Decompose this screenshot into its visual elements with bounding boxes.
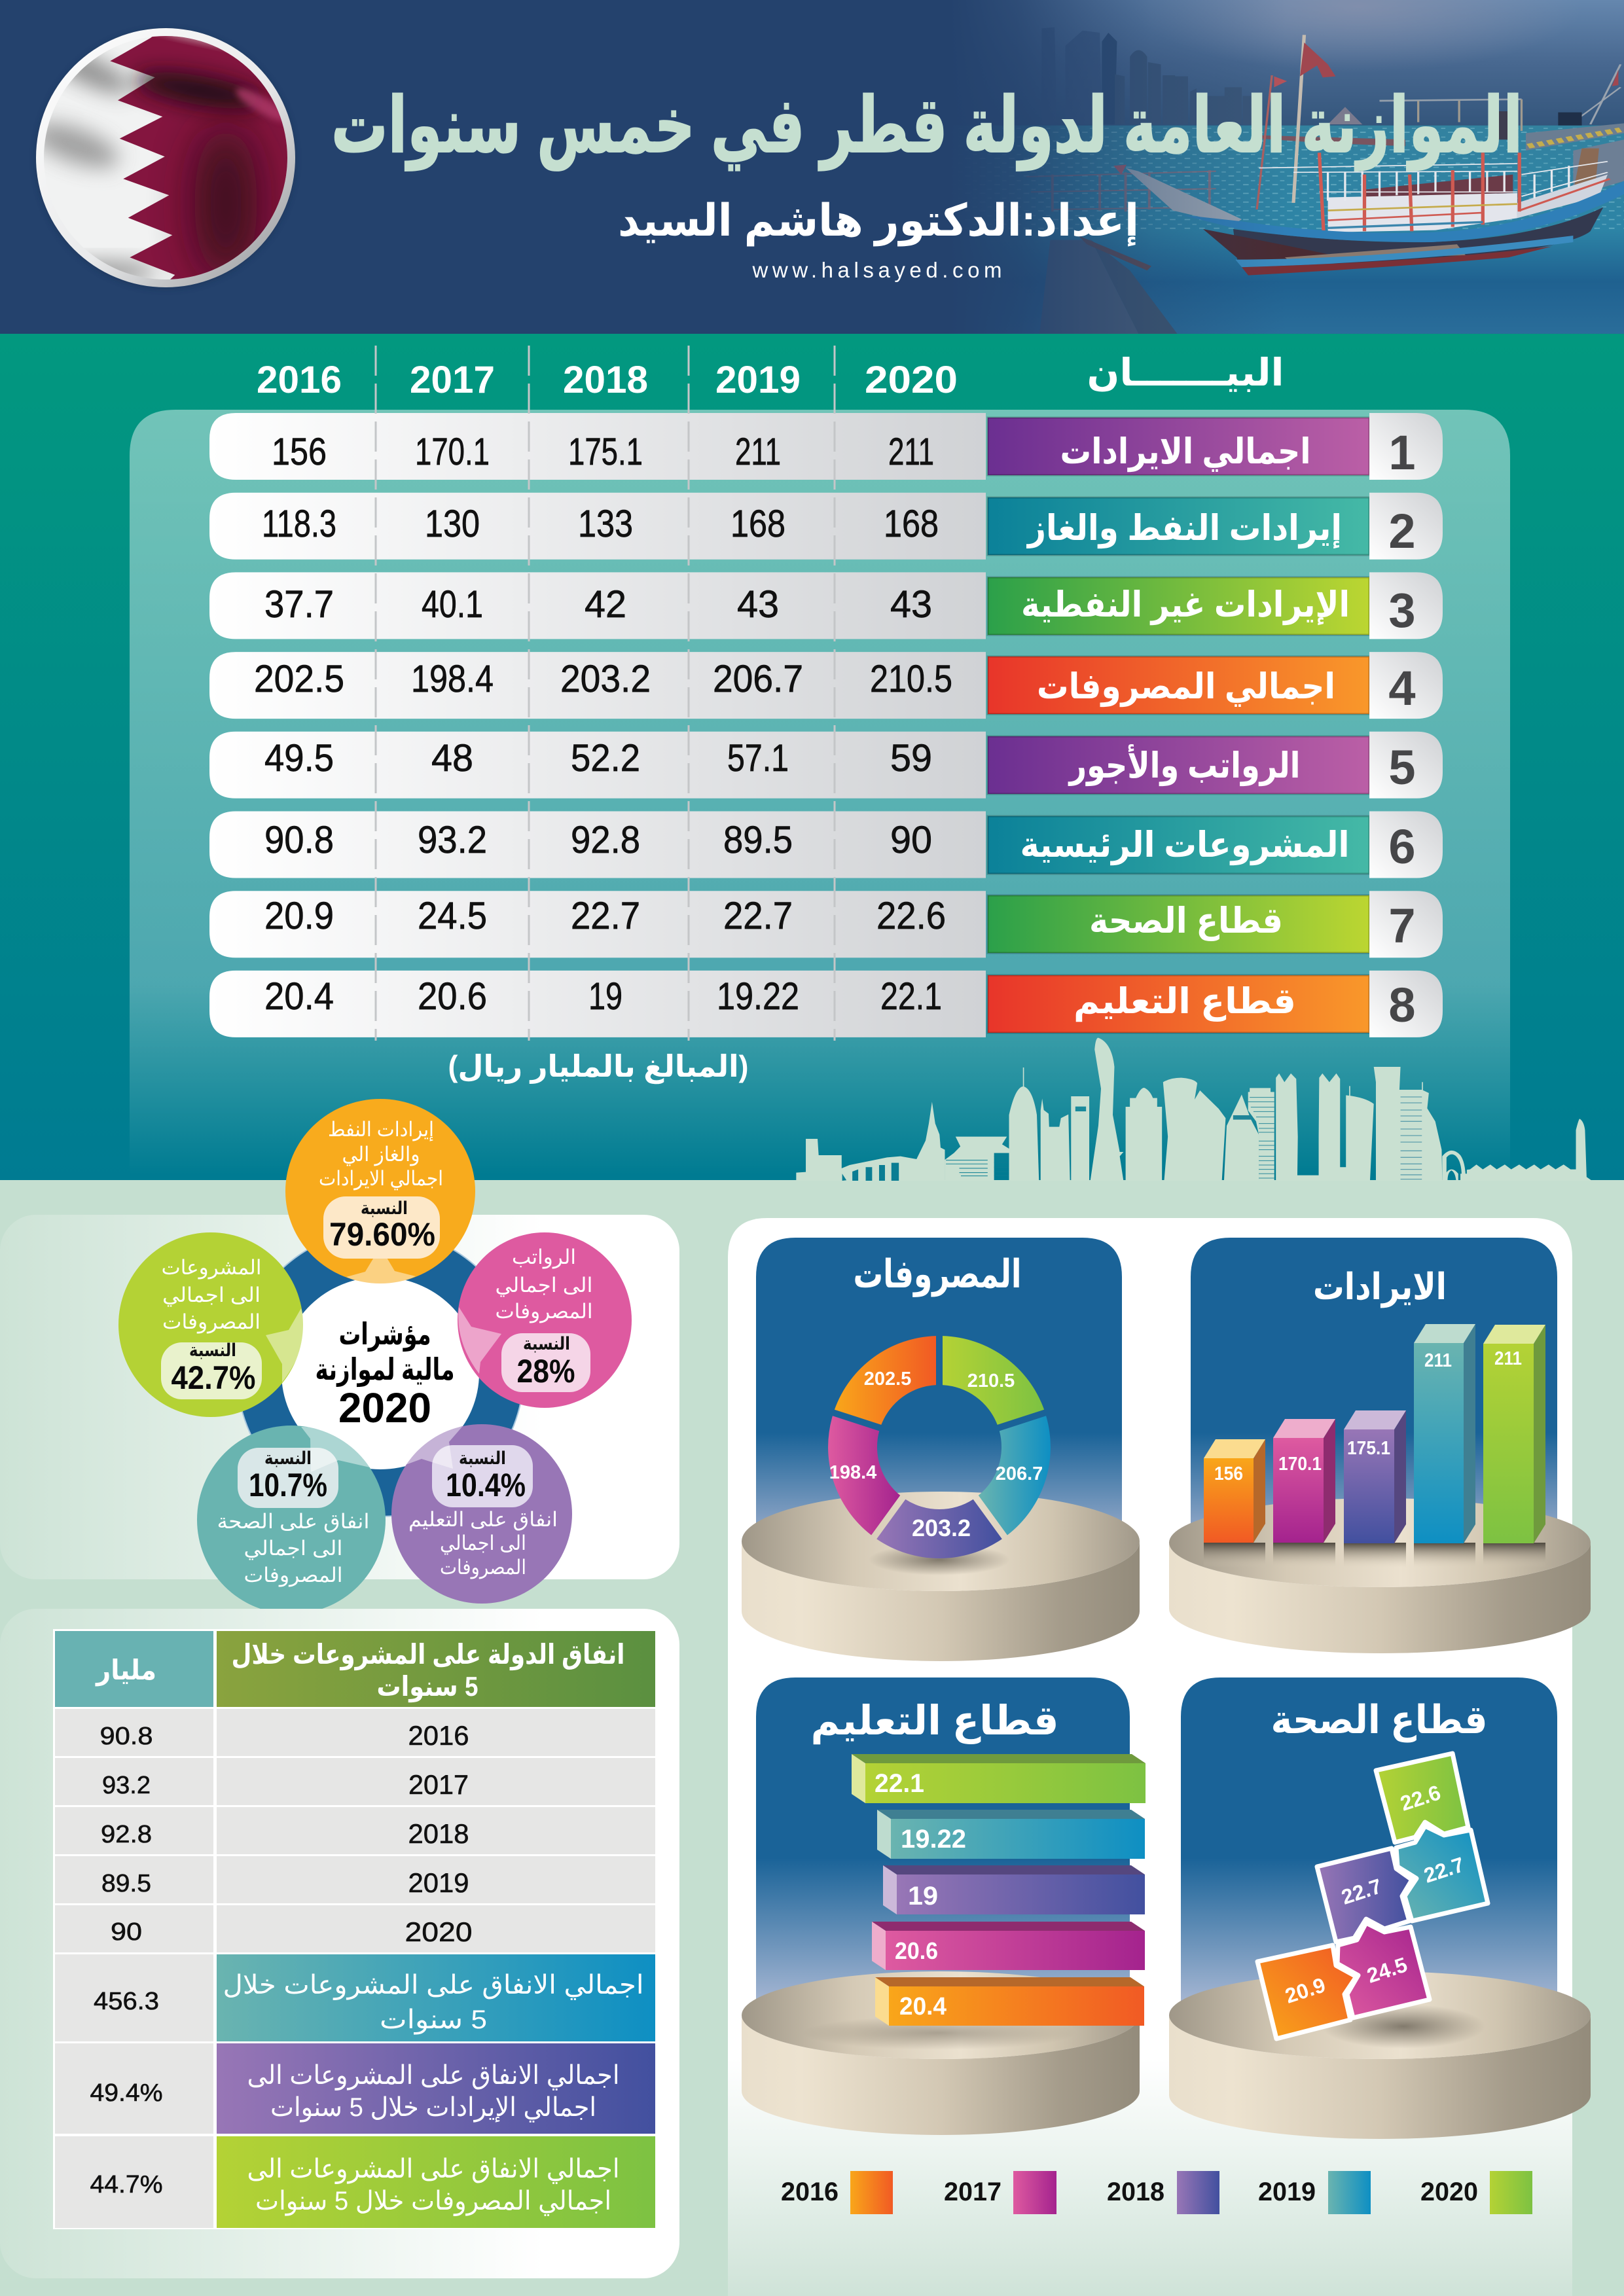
table row: share of expenditure: اجمالي المصروفات خلال 5 سنوات — [255, 2187, 611, 2216]
table row: total spending — [55, 1954, 655, 2041]
bar 2019: 19.22 — [901, 1825, 966, 1854]
row 7: health sector: 24.5 — [418, 895, 487, 937]
bar 2016: 20.4 — [899, 1993, 947, 2020]
central ring — [237, 1230, 524, 1516]
table rows: years: 89.5 — [101, 1870, 151, 1897]
card: health puzzle — [1169, 1677, 1591, 2139]
row 7: health sector — [209, 891, 1443, 958]
bubble: health spending ratio: المصروفات — [244, 1564, 343, 1587]
puzzle values: 22.7 — [1421, 1852, 1467, 1888]
row 5: salaries and wages: 5 — [1388, 740, 1416, 795]
row 8: education sector: 19 — [588, 975, 623, 1018]
table row: total spending: 456.3 — [94, 1988, 159, 2015]
table rows: years: 2018 — [408, 1818, 469, 1849]
donut chart: 203.2 — [912, 1515, 971, 1541]
row 3: non-oil revenues: 3 — [1388, 583, 1416, 637]
central ring: 2020 — [338, 1384, 431, 1431]
puzzle values: 20.9 — [1282, 1973, 1328, 2008]
bar 2017: 20.6 — [895, 1937, 938, 1964]
row 4: total expenditure: اجمالي المصروفات — [1037, 667, 1335, 707]
row 3: non-oil revenues: 37.7 — [264, 583, 334, 626]
bubble: education spending ratio: انفاق على التعليم — [408, 1508, 558, 1532]
row 4: total expenditure — [209, 652, 1443, 719]
table header: مليار — [95, 1655, 156, 1686]
bar 2020 — [1483, 1325, 1545, 1543]
bar 2018 — [1344, 1410, 1406, 1543]
row 3: non-oil revenues: 42 — [585, 583, 626, 626]
row 3: non-oil revenues: 43 — [737, 583, 779, 626]
card: expenditure donut: المصروفات — [854, 1252, 1021, 1297]
row 5: salaries and wages: 57.1 — [727, 737, 789, 780]
bar 2019: 211 — [1424, 1350, 1452, 1371]
row 6: main projects: 93.2 — [418, 819, 487, 861]
header banner — [0, 0, 1624, 334]
bar 2020: 22.1 — [875, 1769, 924, 1798]
table header labels: 2016 — [257, 359, 342, 401]
row 5: salaries and wages: 59 — [890, 737, 932, 780]
row 8: education sector: 8 — [1388, 978, 1416, 1032]
row 8: education sector: 20.4 — [264, 975, 334, 1018]
row 4: total expenditure: 206.7 — [713, 658, 803, 700]
row 8: education sector: 22.1 — [880, 975, 942, 1018]
row 8: education sector: قطاع التعليم — [1074, 982, 1296, 1022]
bar 2019 — [1414, 1324, 1475, 1543]
legend 2017 — [944, 2171, 1056, 2214]
bubble: health spending ratio: انفاق على الصحة — [217, 1510, 369, 1533]
legend 2020: 2020 — [1420, 2178, 1478, 2206]
table header labels: 2019 — [715, 359, 801, 401]
bubble: oil and gas revenue ratio: 79.60% — [329, 1216, 435, 1253]
row 5: salaries and wages — [209, 732, 1443, 798]
bubble: projects ratio: النسبة — [189, 1340, 236, 1360]
row 2: oil and gas revenues: 133 — [578, 503, 633, 545]
row 3: non-oil revenues — [209, 572, 1443, 639]
bar 2018 — [883, 1865, 1145, 1914]
row 1: total revenues: 156 — [272, 431, 327, 473]
row 6: main projects: المشروعات الرئيسية — [1020, 825, 1350, 865]
bar 2017: 170.1 — [1278, 1454, 1322, 1475]
bubble: oil and gas revenue ratio: إيرادات النفط — [328, 1118, 434, 1141]
card: health puzzle: قطاع الصحة — [1271, 1698, 1487, 1743]
bubble: salaries ratio: المصروفات — [495, 1300, 593, 1323]
row 6: main projects: 90 — [890, 819, 932, 861]
row 7: health sector: 22.7 — [723, 895, 793, 937]
table rows: years: 2019 — [408, 1867, 469, 1898]
row 3: non-oil revenues: 40.1 — [422, 583, 483, 626]
bubble: health spending ratio — [197, 1426, 386, 1614]
row 2: oil and gas revenues: 118.3 — [262, 503, 336, 545]
skyline silhouette — [796, 1038, 1592, 1181]
bubble: education spending ratio: النسبة — [459, 1448, 506, 1468]
bubble: salaries ratio: النسبة — [523, 1334, 570, 1354]
bubble: projects ratio — [118, 1232, 304, 1417]
row 2: oil and gas revenues: 168 — [731, 503, 785, 545]
bar 2020: 211 — [1494, 1348, 1522, 1369]
legend 2018 — [1107, 2171, 1219, 2214]
table rows: years: 2017 — [408, 1769, 469, 1800]
table header — [55, 1631, 655, 1707]
row 5: salaries and wages: 48 — [431, 737, 473, 780]
legend 2016: 2016 — [781, 2178, 839, 2206]
platform — [742, 1971, 1140, 2135]
bar 2017 — [872, 1922, 1145, 1970]
row 6: main projects: 89.5 — [723, 819, 793, 861]
platform — [742, 1492, 1140, 1661]
donut chart: 210.5 — [967, 1371, 1015, 1391]
row 1: total revenues: 175.1 — [568, 431, 643, 473]
bar chart — [1204, 1324, 1545, 1568]
donut chart — [828, 1336, 1051, 1558]
legend 2019 — [1258, 2171, 1371, 2214]
row 5: salaries and wages: 52.2 — [571, 737, 640, 780]
donut chart: 198.4 — [829, 1462, 876, 1483]
card: revenue bars — [1169, 1238, 1591, 1653]
legend 2018: 2018 — [1107, 2178, 1164, 2206]
bubble: oil and gas revenue ratio: اجمالي الايرادات — [319, 1167, 443, 1191]
row 7: health sector: 22.7 — [571, 895, 640, 937]
icon: Qatar flag button — [26, 18, 301, 289]
row 7: health sector: 22.6 — [876, 895, 946, 937]
row 3: non-oil revenues: 43 — [890, 583, 932, 626]
subtitle: author: إعداد:الدكتور هاشم السيد — [618, 196, 1139, 247]
row 6: main projects: 90.8 — [264, 819, 334, 861]
table row: share of revenues — [55, 2043, 655, 2134]
row 1: total revenues: 211 — [888, 431, 934, 473]
bubble: health spending ratio: 10.7% — [249, 1467, 327, 1503]
bubble: projects ratio: 42.7% — [171, 1359, 255, 1396]
legend 2020 — [1420, 2171, 1532, 2214]
table row: share of revenues: اجمالي الانفاق على المشروعات الى — [247, 2061, 619, 2090]
bar 2020 — [852, 1754, 1146, 1803]
teal section background — [0, 334, 1624, 1180]
puzzle values: 22.6 — [1398, 1780, 1443, 1816]
table rows: years: 93.2 — [102, 1772, 151, 1799]
panel: financial indicators 2020 — [0, 1099, 679, 1614]
central ring: مالية لموازنة — [316, 1352, 454, 1387]
bubble: salaries ratio: الى اجمالي — [495, 1274, 593, 1297]
row 1: total revenues — [209, 413, 1443, 480]
legend — [781, 2171, 1532, 2214]
row 6: main projects: 92.8 — [571, 819, 640, 861]
table row: share of expenditure: 44.7% — [90, 2171, 162, 2198]
row 7: health sector: 20.9 — [264, 895, 334, 937]
row 8: education sector: 20.6 — [418, 975, 487, 1018]
bar 2016 — [875, 1977, 1144, 2026]
table row: share of revenues: اجمالي الإيرادات خلال 5 سنوات — [270, 2093, 596, 2123]
donut chart: 202.5 — [864, 1369, 911, 1390]
card: revenue bars: الايرادات — [1313, 1266, 1447, 1308]
bubble: health spending ratio: الى اجمالي — [244, 1537, 343, 1560]
row 8: education sector: 19.22 — [717, 975, 799, 1018]
bubble: salaries ratio: الرواتب — [512, 1246, 576, 1269]
row 5: salaries and wages: الرواتب والأجور — [1068, 744, 1300, 786]
row 6: main projects — [209, 812, 1443, 878]
bar 2016 — [1204, 1439, 1265, 1543]
row 2: oil and gas revenues: 2 — [1388, 504, 1416, 558]
row 4: total expenditure: 210.5 — [870, 658, 952, 700]
bubble: salaries ratio — [458, 1232, 632, 1408]
row 1: total revenues: 1 — [1388, 425, 1416, 480]
bubble: education spending ratio: المصروفات — [440, 1556, 526, 1579]
puzzle values: 22.7 — [1339, 1874, 1384, 1909]
card: education bars: قطاع التعليم — [810, 1698, 1059, 1744]
row 7: health sector: 7 — [1388, 899, 1416, 953]
row 4: total expenditure: 4 — [1388, 661, 1416, 715]
card: education bars — [742, 1677, 1146, 2135]
table panel — [130, 346, 1510, 1175]
table header labels — [257, 351, 1284, 401]
row 4: total expenditure: 203.2 — [560, 658, 651, 700]
bubble: salaries ratio: 28% — [517, 1353, 575, 1390]
row 1: total revenues: اجمالي الايرادات — [1060, 432, 1310, 472]
donut chart: 206.7 — [996, 1463, 1043, 1484]
row 4: total expenditure: 198.4 — [411, 658, 494, 700]
row 1: total revenues: 211 — [735, 431, 781, 473]
table rows: years: 2020 — [405, 1916, 473, 1947]
bubble: health spending ratio: النسبة — [264, 1448, 312, 1468]
table row: share of revenues: 49.4% — [90, 2079, 162, 2107]
bubble: education spending ratio: 10.4% — [446, 1467, 526, 1503]
legend 2017: 2017 — [944, 2178, 1001, 2206]
table rows: years: 2016 — [408, 1720, 469, 1751]
table row: share of expenditure: اجمالي الانفاق على المشروعات الى — [247, 2155, 619, 2184]
row 7: health sector: قطاع الصحة — [1089, 901, 1283, 941]
table rows: years: 90.8 — [99, 1723, 153, 1750]
table rows: years: 92.8 — [101, 1821, 152, 1848]
bar 2019 — [877, 1810, 1145, 1859]
row 2: oil and gas revenues: 168 — [884, 503, 939, 545]
panel: projects spending table — [0, 1609, 679, 2278]
bar 2018: 175.1 — [1347, 1438, 1390, 1459]
platform — [1169, 1498, 1591, 1653]
bar 2017 — [1273, 1419, 1335, 1543]
row 1: total revenues: 170.1 — [415, 431, 490, 473]
puzzle pieces — [1257, 1753, 1488, 2039]
bubble: education spending ratio — [391, 1424, 572, 1604]
table header: انفاق الدولة على المشروعات خلال — [232, 1639, 624, 1671]
central ring: مؤشرات — [339, 1317, 431, 1352]
table rows: years: 90 — [111, 1918, 142, 1946]
row 6: main projects: 6 — [1388, 819, 1416, 874]
bar 2016: 156 — [1214, 1463, 1243, 1484]
legend 2019: 2019 — [1258, 2178, 1316, 2206]
unit note: (المبالغ بالمليار ريال) — [448, 1049, 749, 1084]
puzzle values: 24.5 — [1364, 1952, 1410, 1988]
legend 2016 — [781, 2171, 893, 2214]
table row: total spending: 5 سنوات — [380, 2005, 487, 2035]
bubble: oil and gas revenue ratio — [285, 1099, 475, 1285]
bubble: projects ratio: المشروعات — [161, 1256, 262, 1280]
row 3: non-oil revenues: الإيرادات غير النفطية — [1021, 585, 1350, 625]
card: expenditure donut — [742, 1238, 1140, 1661]
row 2: oil and gas revenues — [209, 493, 1443, 560]
photo: dhow boat and Doha skyline — [949, 0, 1624, 334]
table row: share of expenditure — [55, 2136, 655, 2228]
row 8: education sector — [209, 971, 1443, 1037]
row 5: salaries and wages: 49.5 — [264, 737, 334, 780]
row 2: oil and gas revenues: 130 — [425, 503, 480, 545]
row 4: total expenditure: 202.5 — [254, 658, 344, 700]
table rows: years — [55, 1709, 655, 1952]
bubble: oil and gas revenue ratio: والغاز الي — [342, 1143, 420, 1166]
table row: total spending: اجمالي الانفاق على المشروعات خلال — [223, 1971, 644, 2000]
table header labels: البيـــــــان — [1087, 351, 1284, 394]
row 2: oil and gas revenues: إيرادات النفط والغاز — [1026, 509, 1342, 548]
website url: www.halsayed.com — [751, 258, 1001, 282]
panel: charts — [728, 1218, 1591, 2296]
platform — [1169, 1971, 1591, 2139]
table header labels: 2020 — [865, 359, 958, 401]
bubble: projects ratio: الى اجمالي — [162, 1283, 261, 1307]
puzzle values — [1282, 1780, 1467, 2008]
table header labels: 2018 — [563, 359, 648, 401]
table header: 5 سنوات — [377, 1671, 478, 1703]
bubble: projects ratio: المصروفات — [162, 1310, 261, 1334]
bubble: education spending ratio: الى اجمالي — [440, 1532, 526, 1555]
bubble: oil and gas revenue ratio: النسبة — [361, 1198, 408, 1218]
bar 2018: 19 — [908, 1882, 938, 1910]
table header labels: 2017 — [410, 359, 495, 401]
